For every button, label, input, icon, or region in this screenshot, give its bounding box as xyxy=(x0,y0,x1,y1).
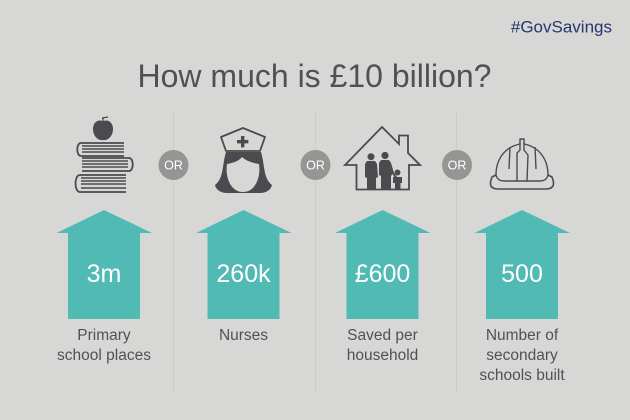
label: number of secondary schools built: secondary xyxy=(486,347,558,364)
arrow: 3m xyxy=(56,210,152,319)
label: saved per household: household xyxy=(347,347,418,364)
title: How much is £10 billion? xyxy=(138,58,491,94)
label: nurses: Nurses xyxy=(219,327,268,344)
icon: nurse xyxy=(215,128,272,193)
or badge 3 xyxy=(442,150,472,180)
label: number of secondary schools built: Number of xyxy=(486,327,559,344)
arrow: £600 xyxy=(335,210,430,319)
or badge 2 xyxy=(300,150,330,180)
hashtag: #GovSavings xyxy=(511,18,612,36)
arrow: 500: 500 xyxy=(501,260,543,288)
arrow: 500 xyxy=(474,210,570,319)
icon: hard hat xyxy=(490,139,554,189)
or badge 1 xyxy=(158,150,188,180)
arrow: 260k: 260k xyxy=(216,260,271,288)
or badge 3: OR xyxy=(448,158,466,172)
arrow: £600: £600 xyxy=(355,260,410,288)
icon: books and apple xyxy=(76,117,133,192)
label: primary school places: Primary xyxy=(77,327,131,344)
or badge 1: OR xyxy=(164,158,183,172)
label: saved per household: Saved per xyxy=(347,327,418,344)
arrow: 3m: 3m xyxy=(87,260,121,288)
label: number of secondary schools built: schools built xyxy=(479,367,565,384)
icon: house with family xyxy=(345,127,420,190)
or badge 2: OR xyxy=(306,158,325,172)
arrow: 260k xyxy=(196,210,292,319)
label: primary school places: school places xyxy=(57,347,151,364)
